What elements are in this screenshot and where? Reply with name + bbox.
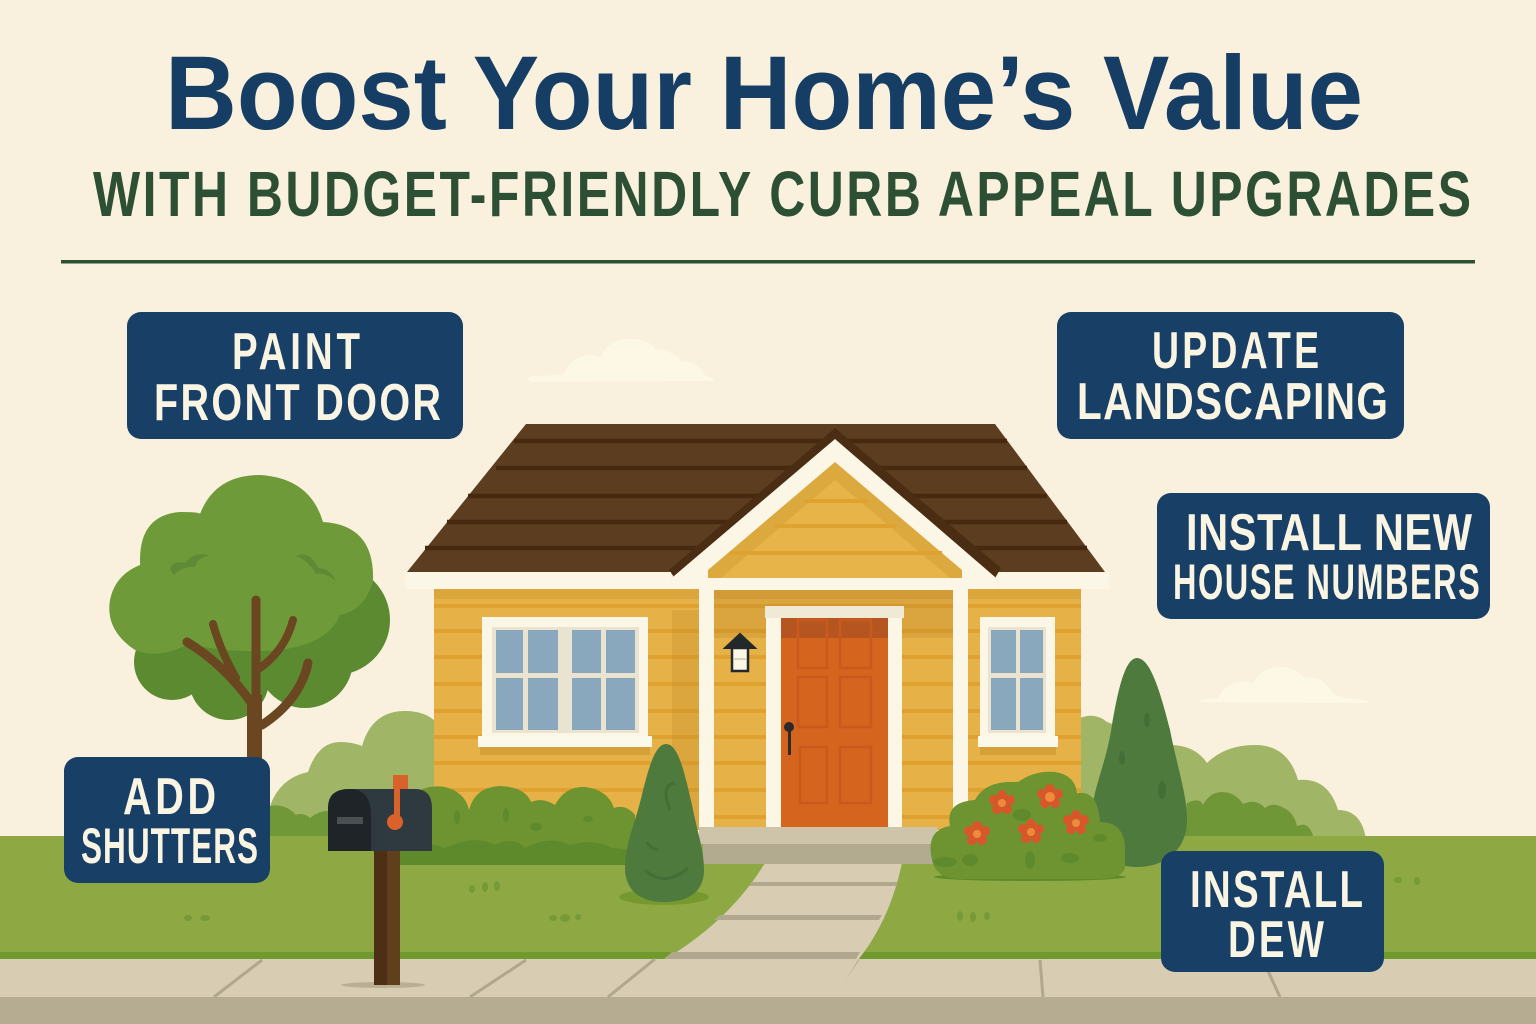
mailbox (328, 775, 432, 988)
callout: install new house numbers: INSTALL NEW (1186, 503, 1472, 561)
small cypress with shadow (619, 744, 709, 905)
left window (478, 617, 652, 755)
lantern (725, 634, 755, 671)
gable (668, 428, 1001, 590)
house (405, 424, 1109, 864)
cloud: right (1197, 667, 1368, 703)
front door (765, 606, 904, 830)
roof (407, 424, 1105, 572)
flowers (964, 784, 1089, 845)
porch posts (699, 589, 968, 830)
tree crown: light (109, 475, 373, 654)
callout: install dew: DEW (1228, 910, 1325, 968)
tree (109, 475, 390, 760)
callout: add shutters (64, 757, 270, 883)
callout: install dew: INSTALL (1190, 860, 1363, 918)
callout: paint front door: PAINT (232, 322, 360, 380)
lawn (0, 836, 1536, 960)
background bushes: left (270, 711, 436, 840)
cloud: left (528, 339, 713, 382)
callout: update landscaping (1057, 312, 1404, 439)
callout: update landscaping: LANDSCAPING (1077, 372, 1388, 430)
callout: paint front door: FRONT DOOR (154, 373, 441, 431)
subtitle: WITH BUDGET-FRIENDLY CURB APPEAL UPGRADES (93, 159, 1471, 230)
callout: install dew (1161, 851, 1384, 972)
callout: update landscaping: UPDATE (1152, 321, 1319, 379)
walkway (612, 863, 902, 997)
fascia (405, 572, 1109, 589)
callout: add shutters: ADD (123, 767, 216, 825)
callout: install new house numbers (1157, 493, 1490, 619)
leaf marks (170, 554, 336, 581)
flowering bush (930, 772, 1126, 881)
wall (434, 589, 1081, 830)
grass tufts (184, 877, 1420, 922)
background bushes: right (1080, 716, 1366, 840)
trunk and branches (187, 600, 308, 725)
tall cypress (1091, 658, 1187, 867)
porch step (699, 827, 937, 864)
callout: paint front door (127, 312, 463, 439)
callout: install new house numbers: HOUSE NUMBERS (1173, 554, 1480, 610)
sidewalk (0, 959, 1536, 1024)
right window (978, 617, 1058, 755)
front hedge (400, 786, 635, 865)
title: Boost Your Home’s Value (165, 35, 1363, 152)
tree crown: dark (134, 565, 390, 720)
callout: add shutters: SHUTTERS (81, 818, 258, 874)
